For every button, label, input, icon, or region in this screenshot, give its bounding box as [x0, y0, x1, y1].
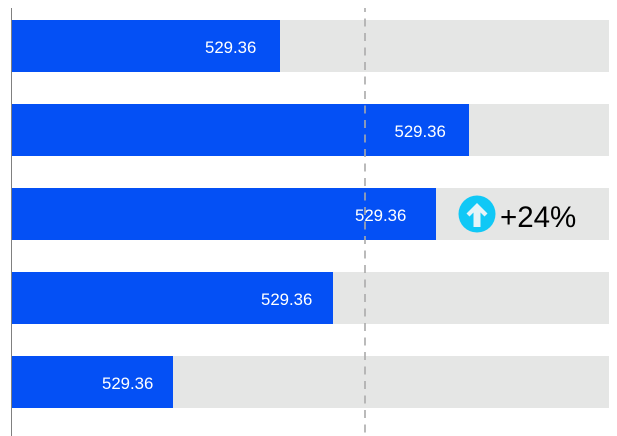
- bar row 4: [12, 272, 609, 324]
- bar row 2: [12, 104, 609, 156]
- bar row 1: 529.36: [205, 38, 256, 57]
- bar row 3: 529.36: [355, 206, 406, 225]
- bar row 2: 529.36: [394, 122, 446, 141]
- bar row 3: [12, 188, 609, 240]
- bar row 4: 529.36: [261, 290, 312, 309]
- dashed reference line: [364, 8, 366, 432]
- change label: +24%: [500, 201, 576, 234]
- bar row 5: [12, 356, 609, 408]
- bar row 1: [12, 20, 609, 72]
- vertical axis: [11, 8, 12, 436]
- bar row 5: 529.36: [102, 374, 153, 393]
- icon: up arrow in circle: [458, 196, 496, 232]
